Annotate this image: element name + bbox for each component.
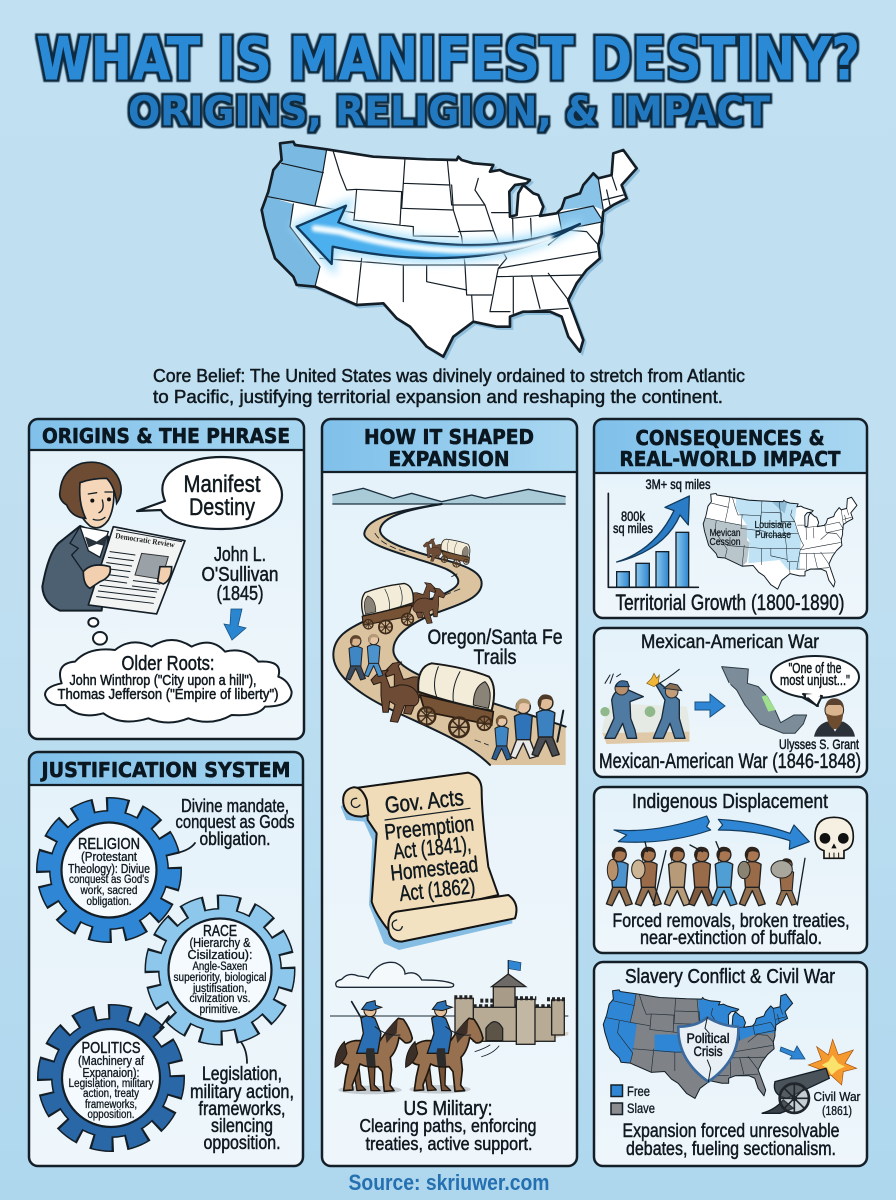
map labels: Cession xyxy=(710,536,741,548)
arrow: down to older roots xyxy=(224,609,246,640)
thought bubble: older roots: Older Roots: xyxy=(122,653,214,675)
caption: sectionalism xyxy=(622,1121,840,1160)
chart: territorial growth bars xyxy=(608,493,698,587)
label: Oregon/Santa Fe Trails: Trails xyxy=(474,646,516,669)
heading: expansion xyxy=(364,425,534,471)
gear: politics: (Machinery af xyxy=(78,1053,144,1068)
map labels xyxy=(710,519,792,548)
panel: Slavery Conflict and Civil War xyxy=(594,962,867,1166)
caption: sectionalism: debates, fueling sectionalism. xyxy=(626,1139,836,1160)
religion note: obligation. xyxy=(200,829,270,849)
politics note xyxy=(190,1064,294,1154)
label: Civil War xyxy=(814,1089,861,1118)
heading: origins: ORIGINS & THE PHRASE xyxy=(42,424,290,448)
label: Civil War: Civil War xyxy=(814,1089,861,1104)
religion note: conquest as Gods xyxy=(176,812,294,832)
legend: Free xyxy=(627,1084,650,1099)
scroll: government acts: Act (1862) xyxy=(398,873,476,906)
caption: US military: treaties, active support. xyxy=(366,1133,532,1154)
caption: US military: Clearing paths, enforcing xyxy=(360,1115,536,1136)
label: Oregon/Santa Fe Trails: Oregon/Santa Fe xyxy=(428,626,562,649)
thought bubble: older roots xyxy=(45,618,292,722)
map labels: Mevican xyxy=(710,527,741,539)
gear: race: Angle-Saxen xyxy=(192,961,248,973)
politics note: frameworks, xyxy=(198,1099,286,1120)
heading: expansion: HOW IT SHAPED xyxy=(364,425,534,449)
caption: displacement: near-extinction of buffalo. xyxy=(640,928,822,949)
chart labels xyxy=(613,477,711,536)
heading: consequences: REAL-WORLD IMPACT xyxy=(620,447,841,471)
gear: race: primitive. xyxy=(200,1004,240,1016)
legend xyxy=(611,1084,655,1116)
gear: politics xyxy=(47,1014,175,1142)
gear: race: (Hierarchy & xyxy=(190,936,251,950)
map labels: Louisiane xyxy=(754,519,792,531)
gear: politics: opposition. xyxy=(88,1109,134,1121)
illustration: cavalry and fort xyxy=(330,960,568,1094)
illustration: soldiers fighting xyxy=(600,669,690,744)
gear: race xyxy=(155,905,285,1035)
politics note: Legislation, xyxy=(202,1064,282,1085)
politics note: opposition. xyxy=(204,1133,280,1154)
gear: race: superiority, biological xyxy=(174,972,266,984)
heading: slavery conflict: Slavery Conflict & Civil War xyxy=(625,966,835,988)
gear: race: justifisation, xyxy=(192,983,247,995)
gear: politics: POLITICS xyxy=(82,1040,140,1057)
speech bubble: Grant quote: most unjust..." xyxy=(780,673,850,689)
illustration: O'Sullivan reading newspaper xyxy=(42,462,185,614)
caption: displacement xyxy=(612,911,850,949)
chart labels: 800k xyxy=(621,508,646,524)
map labels: Purchase xyxy=(755,529,791,541)
author label: John L. xyxy=(214,544,266,566)
speech bubble: Manifest Destiny xyxy=(137,457,282,529)
politics note: silencing xyxy=(211,1116,273,1137)
map: Louisiana Purchase and Mexican Cession xyxy=(703,494,857,589)
author label: O'Sullivan xyxy=(202,564,278,586)
caption: US military xyxy=(360,1098,536,1154)
speech bubble: Manifest Destiny: Destiny xyxy=(189,494,255,521)
panel: Mexican-American War xyxy=(594,628,867,777)
label: Grant: Ulysses S. Grant xyxy=(779,736,859,752)
scroll: government acts: Act (1841), xyxy=(392,831,472,864)
thought bubble: older roots: John Winthrop ("City upon a hill"), xyxy=(70,673,256,689)
panel: consequences and territorial growth xyxy=(594,419,867,618)
caption: US military: US Military: xyxy=(404,1098,492,1120)
heading: consequences xyxy=(620,426,841,471)
subtitle: ORIGINS, RELIGION, & IMPACT xyxy=(128,88,770,136)
thought bubble: older roots: Thomas Jefferson ("Empire of liberty") xyxy=(58,687,278,703)
label: Oregon/Santa Fe Trails xyxy=(428,626,562,669)
core belief text: Core Belief: The United States was divinely ordained to stretch from Atlantic xyxy=(153,365,745,386)
heading: expansion: EXPANSION xyxy=(388,447,510,471)
source line: Source: skriuwer.com xyxy=(348,1170,550,1195)
shield: political crisis: Political xyxy=(686,1030,730,1046)
arrow: war to territory xyxy=(695,694,725,717)
map: Mexico xyxy=(722,667,807,733)
scroll: government acts: Gov. Acts xyxy=(384,784,465,818)
caption: displacement: Forced removals, broken treaties, xyxy=(612,911,850,932)
gear: race: RACE xyxy=(203,923,237,940)
arrow: crisis to war xyxy=(780,1046,805,1059)
scroll: government acts: Homestead xyxy=(389,852,479,886)
illustration: wagon trail xyxy=(332,488,566,765)
core belief text xyxy=(153,365,745,407)
gear: religion: work, sacred xyxy=(80,883,138,897)
shield: political crisis xyxy=(678,1017,738,1082)
map: United States with westward arrow xyxy=(262,142,639,359)
speech bubble: Manifest Destiny: Manifest xyxy=(184,471,261,498)
author label xyxy=(202,544,278,605)
illustration: forced march and skull xyxy=(606,816,853,906)
religion note: Divine mandate, xyxy=(181,796,289,816)
gear: politics: action, treaty xyxy=(83,1088,139,1100)
illustration: cannon firing xyxy=(762,1039,857,1113)
gear: religion: obligation. xyxy=(86,894,132,908)
panel: how it shaped expansion xyxy=(322,419,577,1166)
author label: (1845) xyxy=(216,583,264,605)
heading: displacement: Indigenous Displacement xyxy=(632,791,828,813)
panel: Indigenous Displacement xyxy=(594,787,867,953)
speech bubble: Grant quote xyxy=(771,656,859,706)
label: Civil War: (1861) xyxy=(822,1103,852,1118)
panel: justification system xyxy=(29,752,303,1166)
gear: religion: (Protestant xyxy=(81,849,137,864)
gear: politics: Expanaion): xyxy=(82,1065,140,1080)
gear: religion xyxy=(46,807,172,933)
map: free and slave states xyxy=(603,990,793,1098)
politics note: military action, xyxy=(190,1082,294,1103)
shield: political crisis: Crisis xyxy=(694,1043,722,1059)
gear: religion: RELIGION xyxy=(78,836,140,853)
heading: justification: JUSTIFICATION SYSTEM xyxy=(40,758,291,782)
gear: politics: frameworks, xyxy=(85,1099,137,1111)
religion note xyxy=(176,796,294,849)
core belief text: to Pacific, justifying territorial expansion and reshaping the continent. xyxy=(153,386,723,407)
legend: Slave xyxy=(627,1101,655,1116)
gear: race: civilzation vs. xyxy=(190,993,250,1005)
speech bubble: Grant quote: "One of the xyxy=(788,661,842,677)
gear: politics: Legislation, military xyxy=(68,1078,154,1090)
caption: sectionalism: Expansion forced unresolvable xyxy=(622,1121,840,1142)
portrait: Ulysses S. Grant xyxy=(814,698,855,737)
panel: origins and the phrase xyxy=(29,419,304,739)
heading: war: Mexican-American War xyxy=(641,632,820,653)
gear: religion: Theology): Diviue xyxy=(68,861,150,876)
heading: consequences: CONSEQUENCES & xyxy=(636,426,824,450)
chart labels: 3M+ sq miles xyxy=(646,477,711,492)
gear: religion: conquest as God's xyxy=(69,872,149,886)
chart labels: sq miles xyxy=(613,520,653,536)
scroll: government acts: Preemption xyxy=(383,810,475,845)
gear: race: Cisilzatiou): xyxy=(188,948,252,962)
scroll: government acts xyxy=(341,773,516,950)
newspaper masthead: Democratic Review xyxy=(115,531,176,549)
